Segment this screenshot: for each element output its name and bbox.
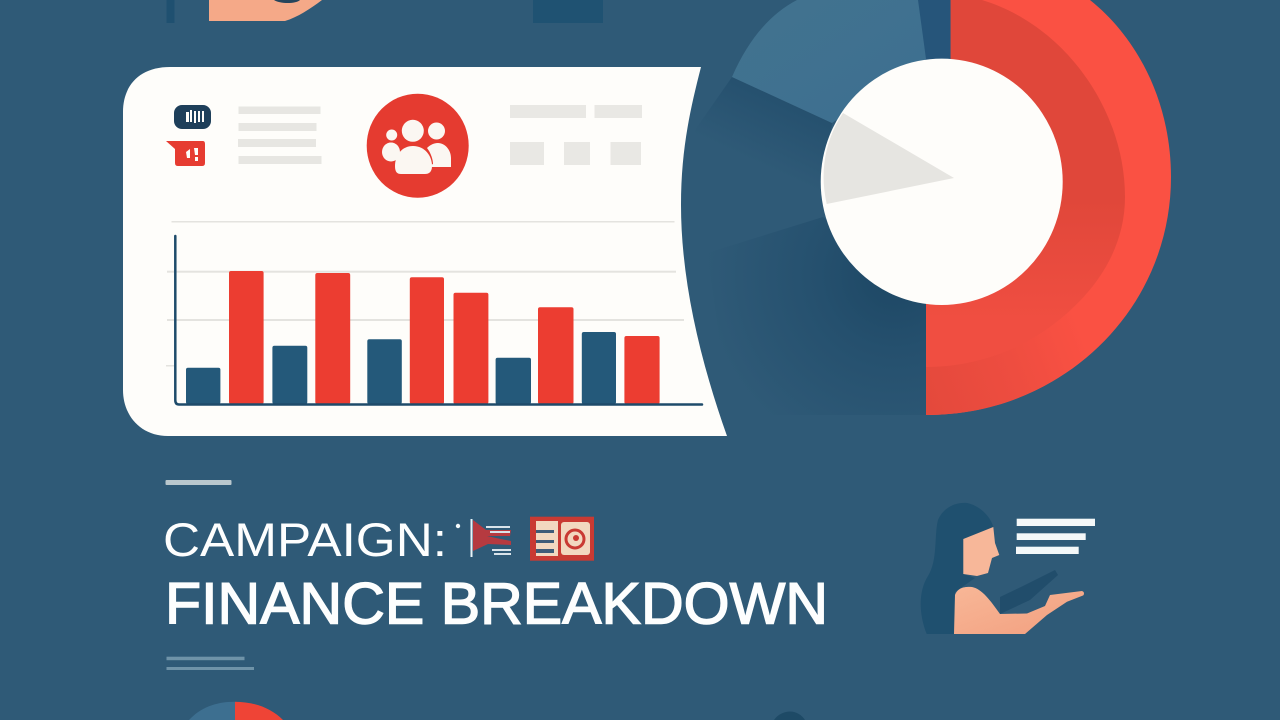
text placeholder lines	[238, 106, 322, 164]
shadow under blue wedge	[695, 77, 832, 253]
hair	[921, 503, 993, 634]
text lines	[1016, 519, 1095, 554]
arm shadow	[1000, 570, 1058, 614]
bottom cropped pie	[189, 702, 283, 720]
shadow lower wedge	[707, 217, 926, 415]
presenter illustration	[921, 503, 1095, 634]
top right placeholders	[510, 105, 642, 165]
red lower band	[926, 300, 1095, 415]
title line 2: FINANCE BREAKDOWN	[165, 572, 828, 636]
face	[963, 527, 999, 576]
red inner arc	[926, 0, 1125, 367]
badge: red tag	[166, 141, 205, 166]
grey slice	[824, 113, 954, 204]
bar chart	[166, 221, 702, 404]
body and arm	[954, 587, 1084, 634]
dark gap segment	[918, 0, 952, 62]
heading rule	[166, 480, 232, 485]
icon: red stamp glyph	[530, 517, 594, 561]
icon: flag glyph	[456, 519, 511, 557]
blue wedge	[732, 0, 926, 123]
panel: dashboard card	[123, 67, 727, 436]
top cropped illustration	[166, 0, 603, 23]
title line 1: CAMPAIGN:	[163, 513, 447, 566]
badge: navy pill	[174, 105, 211, 129]
red outer ring	[926, 0, 1171, 415]
icon: group of people	[367, 94, 469, 198]
pie chart	[695, 0, 1171, 415]
bottom cropped figure	[774, 712, 805, 720]
white centre disc	[821, 59, 1063, 305]
subtitle placeholder lines	[166, 657, 254, 670]
